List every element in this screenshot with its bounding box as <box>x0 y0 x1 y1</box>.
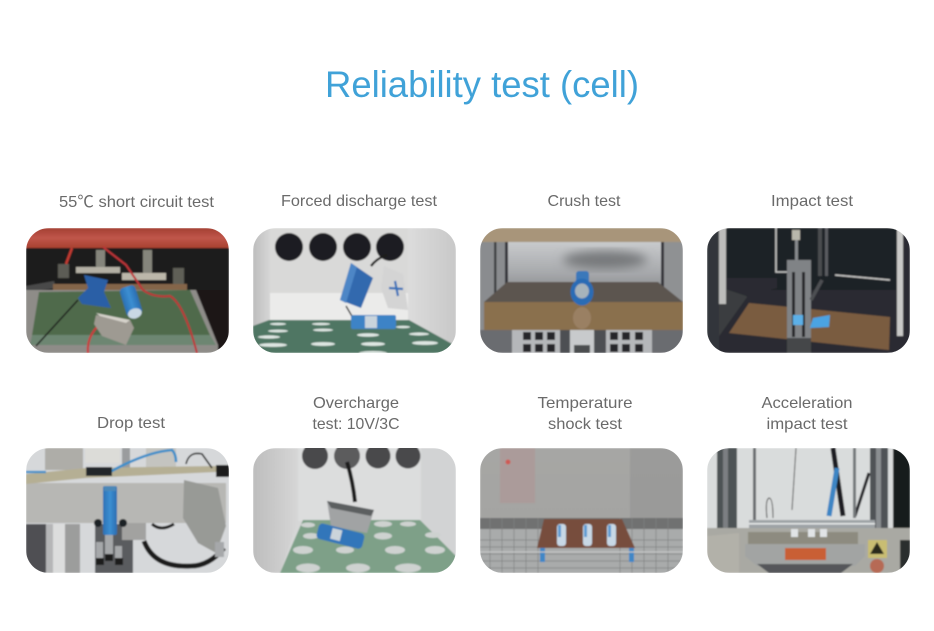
label: overcharge test: test: 10V/3C <box>312 416 400 433</box>
label: acceleration impact test <box>762 395 852 433</box>
label: acceleration impact test: Acceleration <box>762 395 852 412</box>
photo: overcharge test <box>253 443 456 573</box>
photo: impact test <box>707 228 910 353</box>
label: overcharge test: Overcharge <box>313 395 399 412</box>
photo: short circuit test <box>26 228 229 353</box>
photo: forced discharge test <box>253 228 456 355</box>
label: temperature shock test: shock test <box>548 416 623 433</box>
photo: crush test <box>480 228 683 353</box>
label: drop test: Drop test <box>97 415 166 432</box>
label: impact test: Impact test <box>771 193 854 210</box>
photo: drop test <box>26 448 229 573</box>
label: crush test: Crush test <box>548 193 621 210</box>
label: 55℃ short circuit test: 55℃ short circuit test <box>59 194 215 211</box>
label: forced discharge test: Forced discharge test <box>281 193 438 210</box>
label: temperature shock test <box>538 395 633 433</box>
label: temperature shock test: Temperature <box>538 395 633 412</box>
title: Reliability test (cell) <box>325 64 639 105</box>
photo: acceleration impact test <box>707 448 910 573</box>
label: overcharge test <box>312 395 400 433</box>
label: acceleration impact test: impact test <box>766 416 848 433</box>
photo: temperature shock test <box>480 448 683 573</box>
